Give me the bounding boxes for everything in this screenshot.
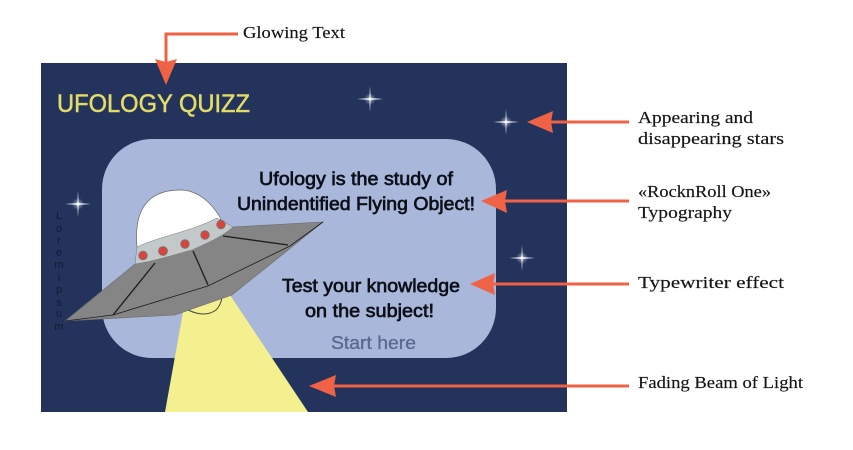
- label: typography: [638, 182, 771, 222]
- panel: night sky background: [41, 63, 567, 412]
- beam of light: [165, 295, 308, 412]
- label: typography: «RocknRoll One»: [638, 182, 771, 201]
- text: typewriter prompt: on the subject!: [305, 301, 434, 321]
- label: glowing text: Glowing Text: [243, 23, 345, 42]
- arrow: typewriter: [470, 273, 629, 295]
- vertical text: lorem ipsum: p: [56, 284, 62, 296]
- vertical text: lorem ipsum: m: [54, 321, 64, 333]
- saucer lights: [139, 220, 225, 260]
- saucer underside arc: [188, 297, 222, 314]
- hull lines: [65, 222, 323, 321]
- label: typewriter: Typewriter effect: [638, 273, 784, 292]
- vertical text: lorem ipsum: L: [56, 210, 62, 222]
- saucer band: [135, 218, 233, 264]
- text: ufology definition: [237, 169, 475, 214]
- vertical text: lorem ipsum: r: [57, 235, 61, 247]
- text: typewriter prompt: Test your knowledge: [282, 276, 460, 296]
- label: stars: Appearing and: [638, 108, 754, 127]
- icon: star right: [509, 245, 535, 271]
- arrow: typography: [481, 190, 629, 213]
- label: typography: Typography: [638, 203, 733, 222]
- label: beam: Fading Beam of Light: [638, 373, 803, 392]
- title: UFOLOGY QUIZZ: [57, 90, 250, 118]
- vertical text: lorem ipsum: s: [56, 297, 62, 309]
- vertical text: lorem ipsum: u: [56, 308, 62, 320]
- icon: star top centre: [357, 86, 383, 112]
- arrow: glowing text: [155, 34, 238, 85]
- label: stars: [638, 108, 784, 148]
- button text: start here: Start here: [331, 333, 416, 353]
- label: stars: disappearing stars: [638, 129, 784, 148]
- panel: rounded content card: [102, 139, 496, 358]
- vertical text: lorem ipsum: m: [54, 259, 64, 271]
- text: typewriter prompt: [282, 276, 460, 321]
- arrow: beam: [309, 375, 629, 397]
- icon: star top right: [493, 109, 519, 135]
- vertical text: lorem ipsum: [54, 210, 64, 333]
- glass dome: [136, 190, 221, 248]
- text: ufology definition: Ufology is the study of: [259, 169, 454, 189]
- text: ufology definition: Unindentified Flying Object!: [237, 194, 475, 214]
- vertical text: lorem ipsum: e: [56, 247, 62, 259]
- saucer hull: [65, 222, 323, 321]
- icon: star left: [65, 191, 91, 217]
- vertical text: lorem ipsum: o: [56, 223, 62, 235]
- vertical text: lorem ipsum: i: [58, 272, 60, 284]
- arrow: stars: [527, 111, 629, 133]
- illustration: flying saucer: [65, 190, 323, 321]
